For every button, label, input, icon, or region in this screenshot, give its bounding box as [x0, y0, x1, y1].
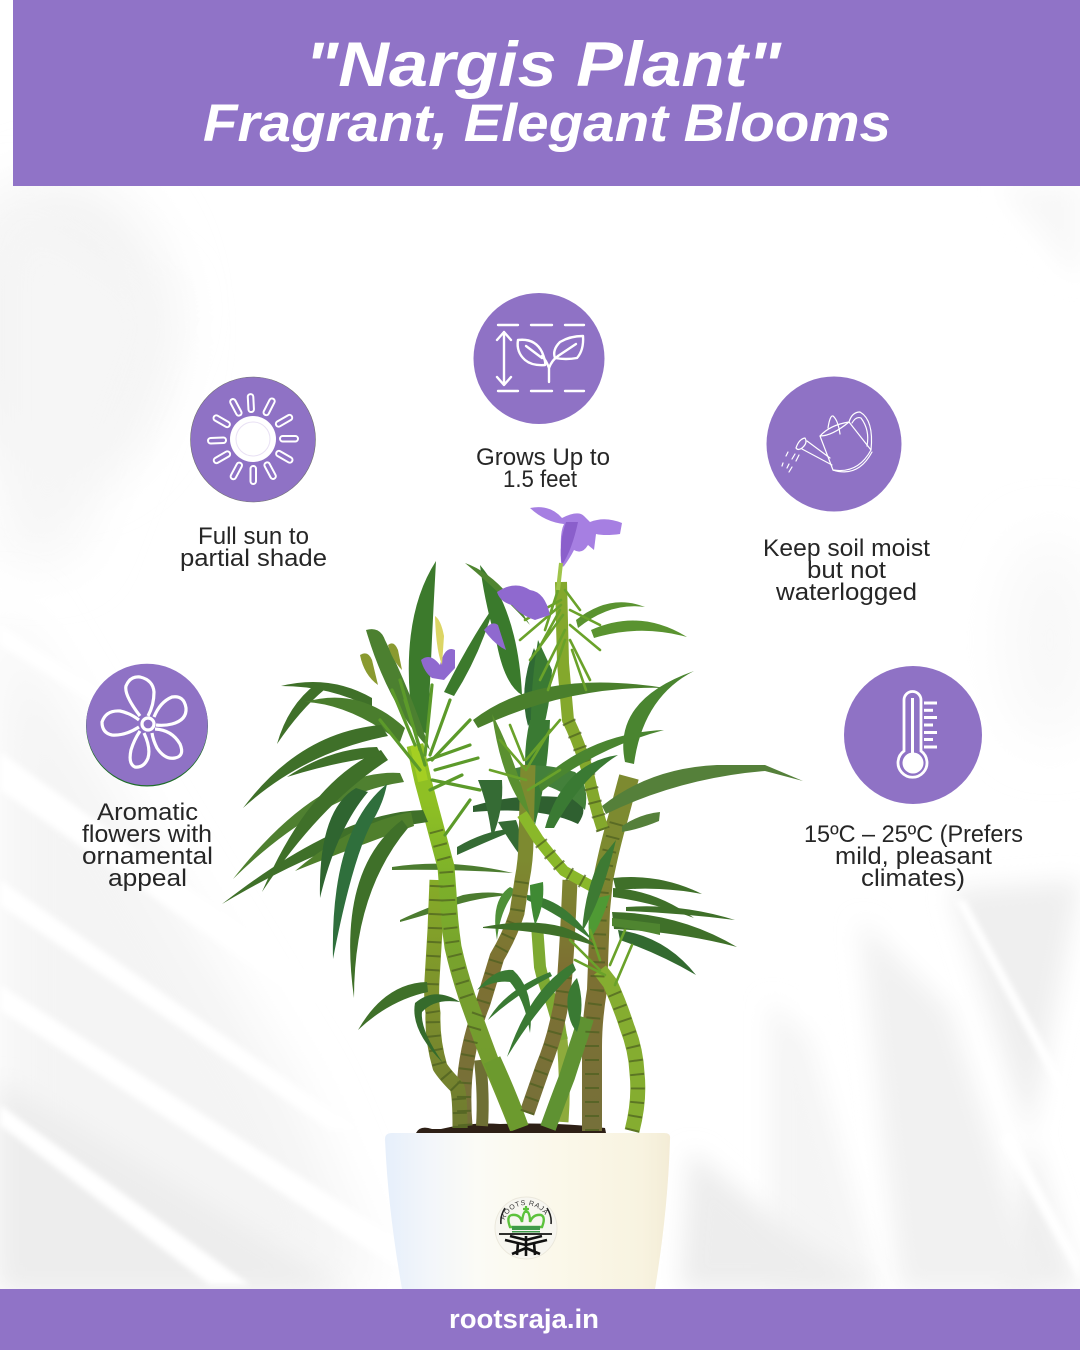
- pot: [385, 1133, 670, 1289]
- label: temperature: mild, pleasant: [835, 843, 992, 870]
- top cluster short leaves: [490, 590, 632, 985]
- feature: height: [474, 293, 610, 493]
- buds: [360, 643, 402, 685]
- rear leaves: [392, 640, 586, 992]
- icon: thermometer: [844, 666, 982, 804]
- label: watering: Keep soil moist: [763, 535, 930, 562]
- icon: watering can: [766, 376, 902, 512]
- label: fragrance: flowers with: [82, 821, 212, 848]
- left foliage: [222, 561, 494, 1063]
- label: sunlight: Full sun to: [198, 523, 309, 550]
- label: fragrance: ornamental: [82, 843, 213, 870]
- flower: lower bloom: [421, 616, 455, 680]
- icon: flower: [86, 664, 208, 786]
- label: height: [476, 444, 610, 493]
- label: watering: [763, 535, 930, 606]
- label: sunlight: partial shade: [180, 545, 327, 572]
- centre and right foliage: [465, 563, 803, 1057]
- left cluster short leaves: [380, 680, 480, 835]
- feature: sunlight: [180, 377, 327, 572]
- stems: [415, 582, 638, 1131]
- flower: middle bloom: [484, 585, 550, 650]
- label: height: Grows Up to: [476, 444, 610, 471]
- stem nodes: [432, 720, 638, 1131]
- label: fragrance: appeal: [108, 865, 187, 892]
- website: rootsraja.in: [449, 1304, 599, 1334]
- label: height: 1.5 feet: [503, 466, 577, 493]
- label: temperature: 15ºC – 25ºC (Prefers: [804, 821, 1023, 848]
- label: temperature: [804, 821, 1023, 892]
- feature: watering: [763, 376, 930, 606]
- logo badge: ROOTS RAJA: [500, 1200, 548, 1220]
- flower: top bloom: [530, 507, 622, 590]
- logo badge: [494, 1196, 558, 1260]
- feature: temperature: [804, 666, 1023, 892]
- soil: [416, 1124, 606, 1133]
- label: fragrance: Aromatic: [97, 799, 198, 826]
- footer band: [0, 1289, 1080, 1350]
- subtitle: Fragrant, Elegant Blooms: [203, 94, 891, 153]
- label: sunlight: [180, 523, 327, 572]
- label: watering: waterlogged: [775, 579, 917, 606]
- feature: fragrance: [82, 664, 213, 892]
- icon: plant height: [474, 293, 604, 424]
- plant illustration: [222, 507, 803, 1133]
- icon: sun: [190, 377, 316, 502]
- label: fragrance: [82, 799, 213, 892]
- title: plant name: "Nargis Plant": [305, 30, 782, 100]
- header band: [13, 0, 1080, 186]
- label: watering: but not: [807, 557, 886, 584]
- label: temperature: climates): [861, 865, 965, 892]
